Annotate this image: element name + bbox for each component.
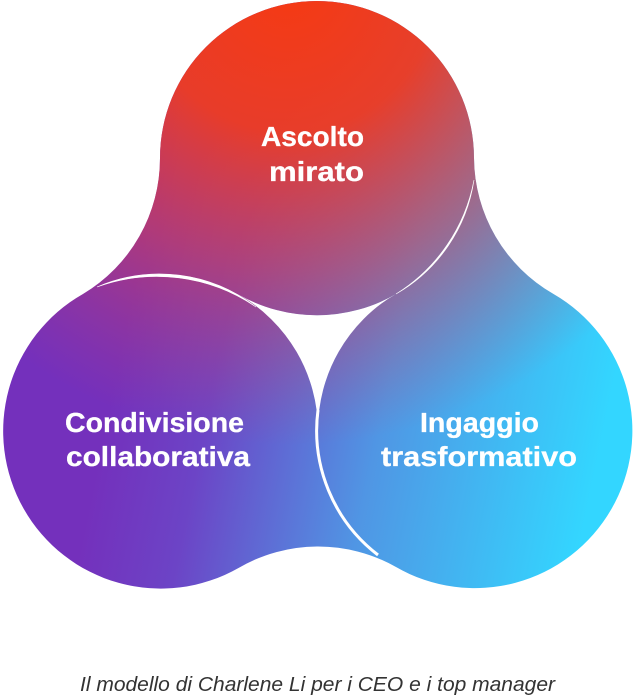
white arc: right circle edge xyxy=(317,410,378,555)
label: Ingaggio trasformativo xyxy=(381,407,577,472)
label: Condivisione collaborativa: collaborativa xyxy=(66,441,250,472)
label: Condivisione collaborativa xyxy=(65,407,250,472)
label: Ascolto mirato: Ascolto xyxy=(261,121,364,152)
label: Ascolto mirato xyxy=(261,121,364,187)
label: Ingaggio trasformativo: Ingaggio xyxy=(420,407,539,438)
label: Condivisione collaborativa: Condivisione xyxy=(65,407,244,438)
label: Ingaggio trasformativo: trasformativo xyxy=(381,441,577,472)
white arc: top circle edge xyxy=(396,180,474,294)
caption: Il modello di Charlene Li per i CEO e i top manager xyxy=(80,674,556,696)
label: Ascolto mirato: mirato xyxy=(269,156,364,187)
white arc: left circle edge xyxy=(97,274,256,307)
